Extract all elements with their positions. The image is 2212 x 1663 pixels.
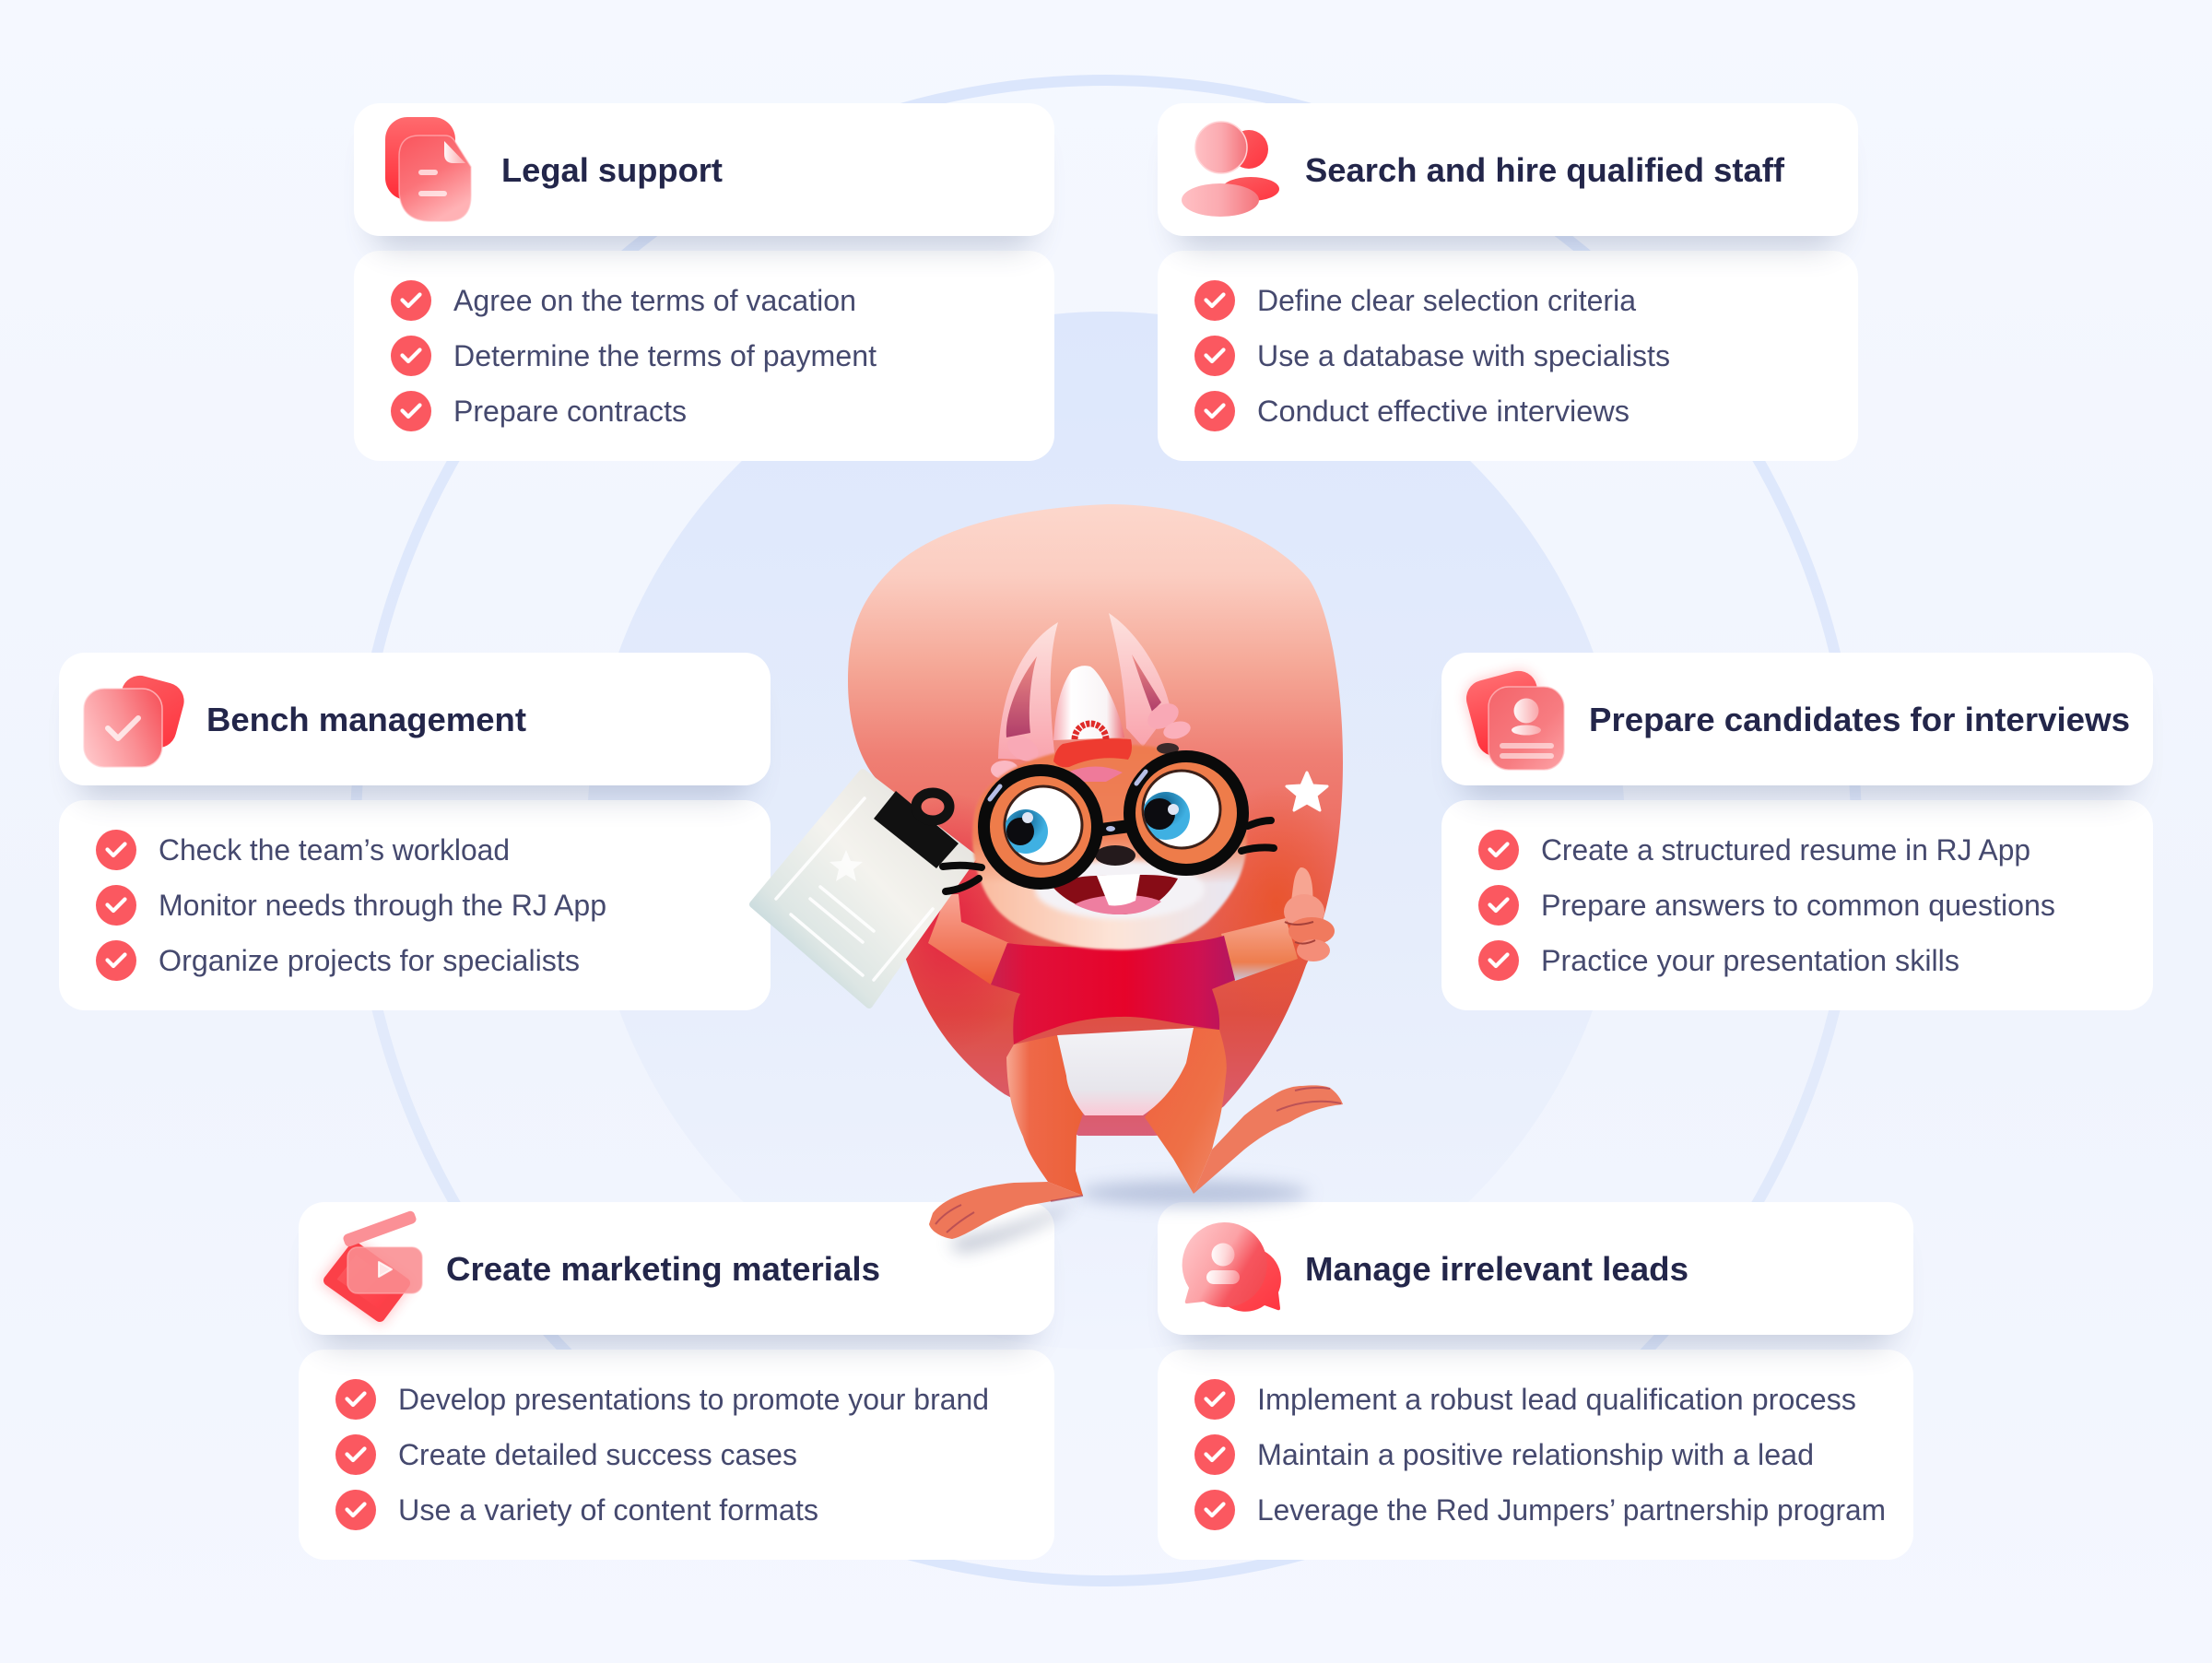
checklist: Create detailed success cases: [398, 1438, 797, 1471]
icon: people: [1182, 122, 1279, 217]
checklist: Prepare answers to common questions: [1541, 889, 2055, 922]
left leg: [1006, 1035, 1083, 1196]
illustration: squirrel mascot: [753, 498, 1355, 1252]
clipboard: [753, 773, 973, 1005]
icon: video: [329, 1209, 422, 1316]
head: [972, 745, 1247, 949]
checklist: Use a variety of content formats: [398, 1493, 818, 1527]
heading: Bench management: [206, 701, 526, 738]
right foot: [1194, 1085, 1343, 1194]
checklist: Define clear selection criteria: [1257, 284, 1636, 317]
panel: legal support: [354, 103, 1054, 461]
panel: irrelevant leads: [1158, 1202, 1913, 1560]
ground shadow: [949, 1180, 1309, 1252]
heading: Create marketing materials: [446, 1250, 880, 1288]
outer ring: [356, 80, 1856, 1581]
ears: [991, 613, 1193, 779]
checklist: [96, 830, 606, 981]
muzzle: [1035, 860, 1205, 919]
checklist: Agree on the terms of vacation: [453, 284, 856, 317]
right hand: [1284, 867, 1335, 961]
icon: resume cards: [1462, 666, 1564, 770]
icon: checkmark cards: [84, 671, 188, 767]
checklist: Maintain a positive relationship with a lead: [1257, 1438, 1814, 1471]
checklist: Implement a robust lead qualification process: [1257, 1383, 1856, 1416]
checklist: [1194, 280, 1670, 431]
checklist: Develop presentations to promote your brand: [398, 1383, 989, 1416]
panel: marketing materials: [299, 1202, 1054, 1560]
heading: Legal support: [501, 151, 723, 189]
panel: bench management: [59, 653, 771, 1010]
panel: search and hire: [1158, 103, 1858, 461]
checklist: Prepare contracts: [453, 395, 687, 428]
heading: Search and hire qualified staff: [1305, 151, 1785, 189]
inner disc: [587, 312, 1625, 1350]
checklist: Create a structured resume in RJ App: [1541, 833, 2030, 867]
icon: chat bubbles: [1182, 1222, 1281, 1312]
checklist: Use a database with specialists: [1257, 339, 1670, 372]
heading: Prepare candidates for interviews: [1589, 701, 2130, 738]
checklist: Check the team’s workload: [159, 833, 510, 867]
belly: [1057, 1028, 1194, 1115]
checklist: Leverage the Red Jumpers’ partnership program: [1257, 1493, 1886, 1527]
checklist: [1478, 830, 2055, 981]
mouth: [1053, 874, 1178, 914]
checklist: [391, 280, 877, 431]
heading: Manage irrelevant leads: [1305, 1250, 1688, 1288]
checklist: [335, 1379, 989, 1530]
whiskers: [943, 820, 1274, 891]
tail: [839, 498, 1355, 1143]
left foot: [929, 1182, 1083, 1239]
checklist: Monitor needs through the RJ App: [159, 889, 606, 922]
nose: [1095, 845, 1135, 866]
icon: documents: [385, 117, 471, 221]
star: [1287, 773, 1327, 810]
glasses and eyes: [983, 756, 1243, 884]
checklist: Determine the terms of payment: [453, 339, 877, 372]
right leg: [1145, 1028, 1227, 1194]
checklist: Organize projects for specialists: [159, 944, 580, 977]
checklist: Practice your presentation skills: [1541, 944, 1959, 977]
shirt: [991, 936, 1235, 1044]
cap: [1053, 724, 1179, 782]
checklist: [1194, 1379, 1886, 1530]
checklist: Conduct effective interviews: [1257, 395, 1630, 428]
right arm: [1221, 918, 1298, 981]
left arm: [928, 894, 1009, 985]
panel: prepare candidates: [1441, 653, 2153, 1010]
